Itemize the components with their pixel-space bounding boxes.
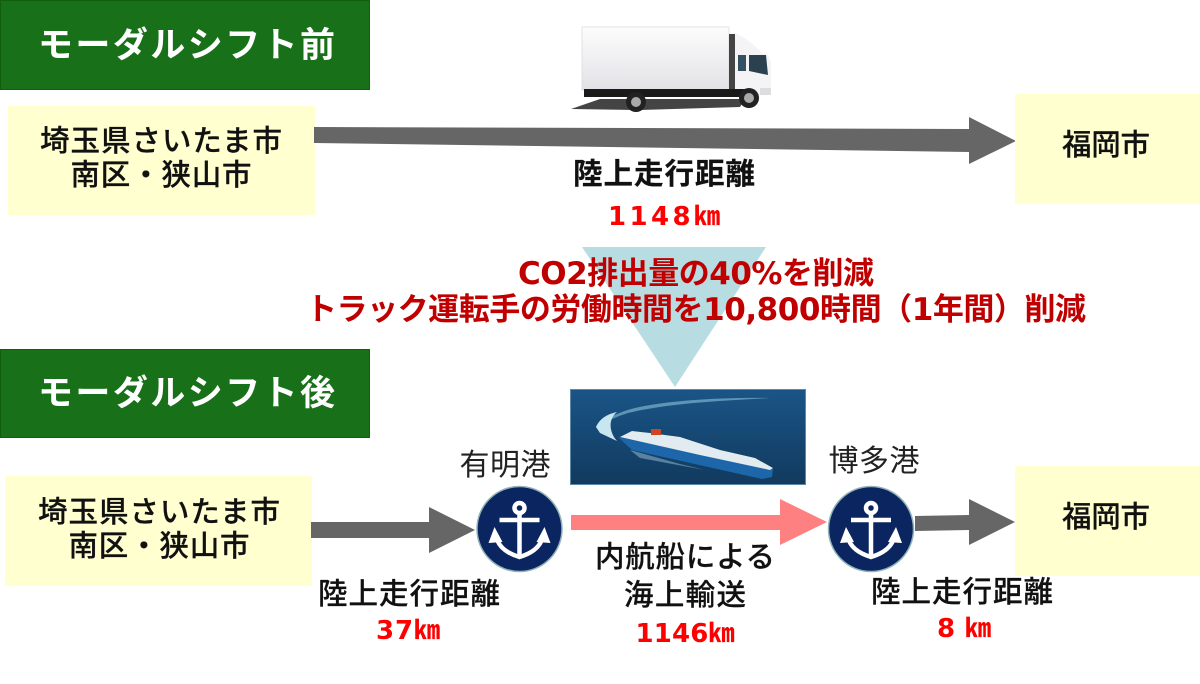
origin box: Saitama (before): 南区・狭山市 [70, 159, 252, 192]
icon: anchor Ariake [477, 486, 562, 572]
label: sea transport 1146km: 海上輸送 [624, 579, 746, 612]
heading: after modal shift [0, 350, 370, 438]
destination box: Fukuoka (before): 福岡市 [1062, 129, 1150, 162]
arrow: truck route [314, 117, 1016, 164]
photo: ferry at sea [570, 390, 806, 484]
destination box: Fukuoka (after) [1015, 466, 1200, 576]
heading: after modal shift: モーダルシフト後 [38, 373, 335, 413]
label: land distance 1148km: 陸上走行距離 [573, 158, 755, 191]
port label: Hakata: 博多港 [828, 445, 920, 478]
label: land distance 37km: 37㎞ [376, 616, 440, 646]
origin box: Saitama (after): 埼玉県さいたま市 [38, 496, 280, 529]
heading: before modal shift [0, 0, 370, 90]
label: sea transport 1146km [595, 541, 775, 649]
arrow: sea route [571, 499, 827, 545]
arrow: downward triangle [582, 247, 766, 387]
callout: reduction results [306, 256, 1086, 328]
label: land distance 1148km [573, 158, 755, 232]
port label: Ariake: 有明港 [460, 449, 550, 482]
callout: reduction results: トラック運転手の労働時間を10,800時間（1年間）削減 [306, 292, 1086, 328]
label: land distance 1148km: 1148㎞ [608, 202, 720, 232]
origin box: Saitama (after): 南区・狭山市 [68, 530, 250, 563]
label: sea transport 1146km: 内航船による [595, 541, 775, 574]
label: land distance 37km: 陸上走行距離 [318, 578, 500, 611]
icon: truck [571, 27, 771, 112]
label: sea transport 1146km: 1146㎞ [636, 619, 734, 649]
label: land distance 37km [318, 578, 500, 646]
label: land distance 8km [871, 576, 1053, 644]
destination box: Fukuoka (after): 福岡市 [1062, 501, 1150, 534]
label: land distance 8km: 陸上走行距離 [871, 576, 1053, 609]
icon: anchor Hakata [828, 486, 914, 572]
label: land distance 8km: 8㎞ [937, 614, 991, 644]
origin box: Saitama (after) [5, 476, 312, 586]
callout: reduction results: CO2排出量の40%を削減 [518, 256, 874, 292]
destination box: Fukuoka (before) [1015, 94, 1200, 204]
arrow: Hakata to Fukuoka [915, 499, 1015, 545]
heading: before modal shift: モーダルシフト前 [38, 25, 335, 65]
arrow: Saitama to Ariake [311, 507, 475, 553]
origin box: Saitama (before): 埼玉県さいたま市 [40, 125, 282, 158]
origin box: Saitama (before) [8, 106, 315, 215]
